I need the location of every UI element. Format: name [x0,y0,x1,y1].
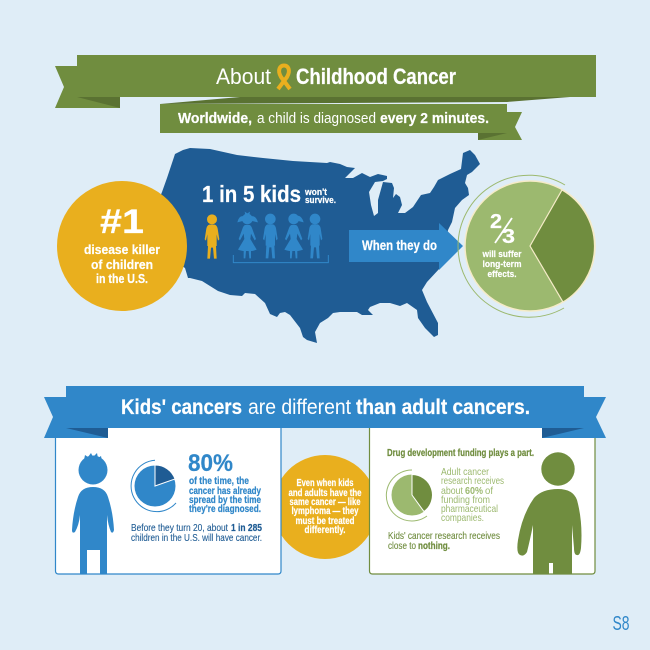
icon: yellow child [205,214,219,259]
text: time spread: they're diagnosed. [189,504,261,515]
text: 1 in 285: children in the U.S. will have cancer. [131,532,262,544]
two thirds label: effects. [488,269,516,280]
section heading text: Kids' cancers [121,396,242,419]
text: kids funding: close to [388,540,416,552]
heading: 1 in 5 kids: survive. [305,195,336,205]
subtitle text: a child is diagnosed [257,110,376,127]
stat: 80%: 80% [188,450,233,477]
subtitle ribbon [160,104,522,140]
icon: green adult [517,452,582,574]
text: 1 in 285: Before they turn 20, about [131,522,228,534]
text: time spread [189,476,261,515]
callout: even when kids and adults: Even when kids [296,478,354,489]
section ribbon [44,386,606,438]
pie chart: two thirds [458,175,595,317]
icon: awareness ribbon [278,66,290,89]
icon: blue child [72,453,114,574]
arrow: when they do: When they do [362,237,437,253]
arrow: when they do [349,223,463,270]
heading: 1 in 5 kids: won't [304,187,327,197]
text: 1 in 285: 1 in 285 [231,522,262,534]
subtitle text [178,110,489,127]
text: adult funding: Adult cancer [441,466,489,478]
callout: even when kids and adults: same cancer — like [290,497,361,508]
icon: boy 1 [263,214,278,258]
text: adult funding: funding from [441,494,490,506]
text: kids funding: Kids' cancer research receives [388,530,500,542]
US map [158,148,480,343]
title ribbon [55,55,596,108]
text: adult funding: pharmaceutical [441,503,498,515]
panel: kids [56,425,281,574]
bracket [233,255,328,263]
callout: #1 disease killer: #1 [100,203,144,241]
text: time spread: spread by the time [189,495,261,506]
callout: even when kids and adults [273,455,377,559]
pie chart: 60 percent [386,470,432,521]
section heading text: than adult cancers. [356,396,530,419]
subtitle text: every 2 minutes. [380,110,489,127]
two thirds label: 2 [490,211,502,233]
title text: Childhood Cancer [296,64,456,89]
panel: adults [370,425,595,574]
text: adult funding: 60% [465,485,484,497]
callout: #1 disease killer: disease killer [84,243,160,257]
title text: About [216,64,271,89]
section heading text: are different [248,396,351,419]
title text [216,64,456,89]
two thirds label [482,211,522,280]
icon: boy 2 [308,214,322,258]
pie chart: 80 percent [131,460,176,512]
callout: even when kids and adults: and adults have the [288,488,362,499]
text: 1 in 285 [131,522,262,544]
callout: #1 disease killer: in the U.S. [96,272,148,286]
icon: girl 2 [284,214,304,258]
callout: even when kids and adults: lymphoma — they [292,506,359,517]
heading: drug development: Drug development funding plays a part. [387,448,534,459]
two thirds label: 3 [502,226,515,248]
two thirds label: will suffer [482,249,522,260]
text: adult funding: research receives [441,475,504,487]
section heading text [121,396,530,419]
logo: S8: S8 [612,613,630,635]
text: kids funding [388,530,500,552]
text: adult funding: about [441,485,463,497]
text: time spread: of the time, the [189,476,249,487]
text: adult funding: companies. [441,512,484,524]
callout: even when kids and adults: differently. [304,525,346,536]
text: time spread: cancer has already [189,486,261,497]
callout: #1 disease killer [57,181,187,311]
icon: row of children [205,212,328,263]
heading: 1 in 5 kids: 1 in 5 kids [202,181,301,207]
two thirds label: long-term [482,259,522,270]
text: adult funding [441,466,504,524]
icon: girl 1 [237,212,258,258]
callout: #1 disease killer: of children [91,258,153,272]
text: adult funding: of [485,485,493,497]
subtitle text: Worldwide, [178,110,252,127]
text: kids funding: nothing. [418,540,450,552]
callout: even when kids and adults: must be treated [296,516,355,527]
